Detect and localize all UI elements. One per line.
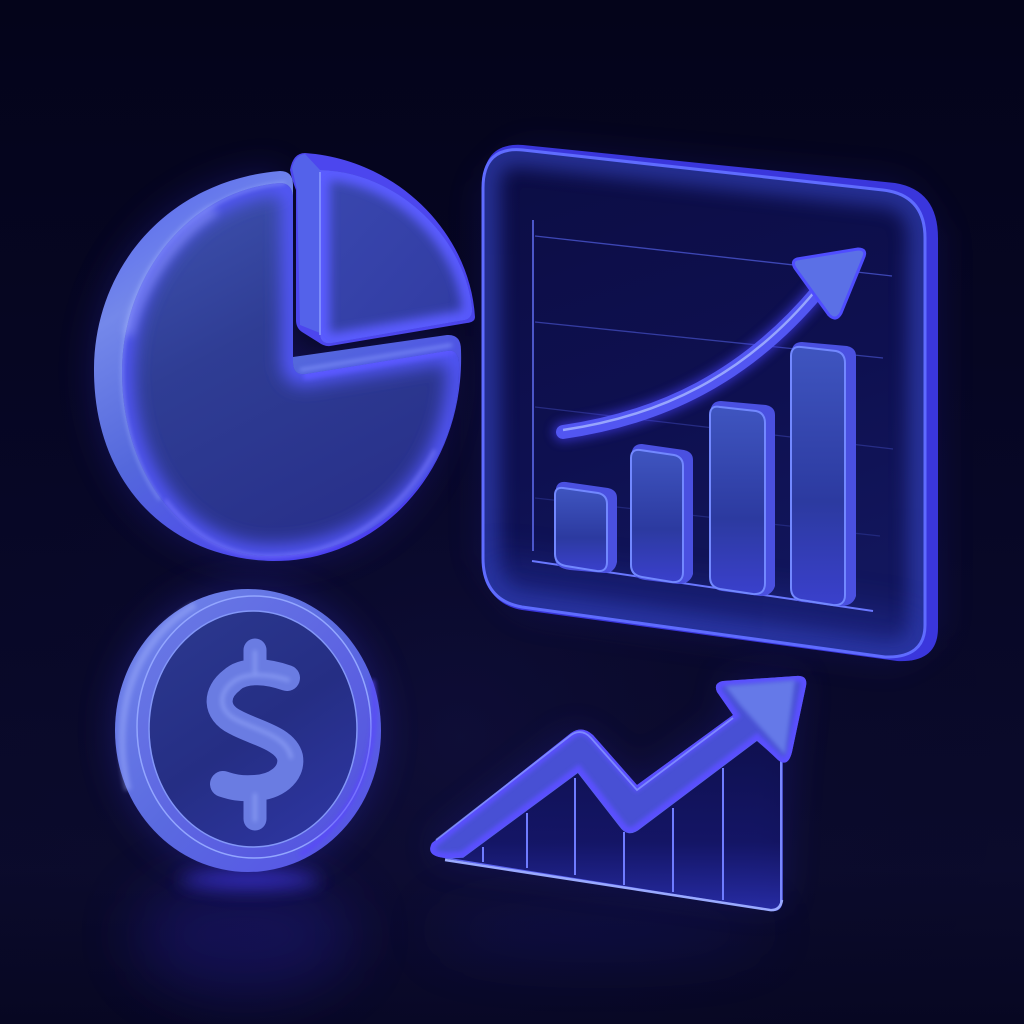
vertical grid bars <box>483 760 781 905</box>
grid lines and axes <box>532 220 893 611</box>
bar 3 <box>710 401 775 596</box>
pie chart icon <box>90 153 480 570</box>
pie main body side wall <box>94 171 461 561</box>
chart panel <box>483 145 938 661</box>
panel edge highlight <box>483 150 925 657</box>
panel side wall <box>483 145 938 661</box>
dollar coin <box>113 585 383 875</box>
left rim shine <box>122 605 195 790</box>
panel face <box>483 150 925 657</box>
area under trend <box>445 740 782 910</box>
coin bevel ring <box>137 596 371 858</box>
arrow head <box>793 249 865 318</box>
slice side wall <box>290 153 475 346</box>
bar 1 <box>555 482 617 573</box>
dollar sign icon <box>220 650 291 820</box>
pie slice <box>290 153 480 350</box>
arrow shaft glow <box>563 291 818 432</box>
trend band inner shading <box>430 676 806 858</box>
coin outer rim <box>115 589 381 872</box>
pie glow <box>94 171 449 561</box>
right rim violet edge <box>300 680 375 855</box>
slice top left bevel <box>292 154 320 333</box>
pie main front face <box>122 183 460 556</box>
arrow shaft <box>563 291 818 432</box>
pie rim highlight <box>122 183 285 500</box>
coin glow <box>113 585 383 875</box>
slice face <box>320 170 472 344</box>
baseline highlight <box>445 860 782 910</box>
bar 4 <box>791 342 856 606</box>
panel glow <box>483 150 938 660</box>
coin inner face <box>149 611 357 847</box>
floor reflection glow under coin <box>135 873 770 995</box>
pie lower glow edge <box>165 450 435 556</box>
trend band edge <box>436 718 733 840</box>
trend line chart icon <box>430 675 806 910</box>
trend glow <box>432 675 800 905</box>
bar 2 <box>631 444 693 584</box>
slice highlight <box>319 172 321 335</box>
trend band <box>430 676 806 858</box>
panel inner glow <box>483 150 925 657</box>
growth arrow <box>563 249 865 432</box>
